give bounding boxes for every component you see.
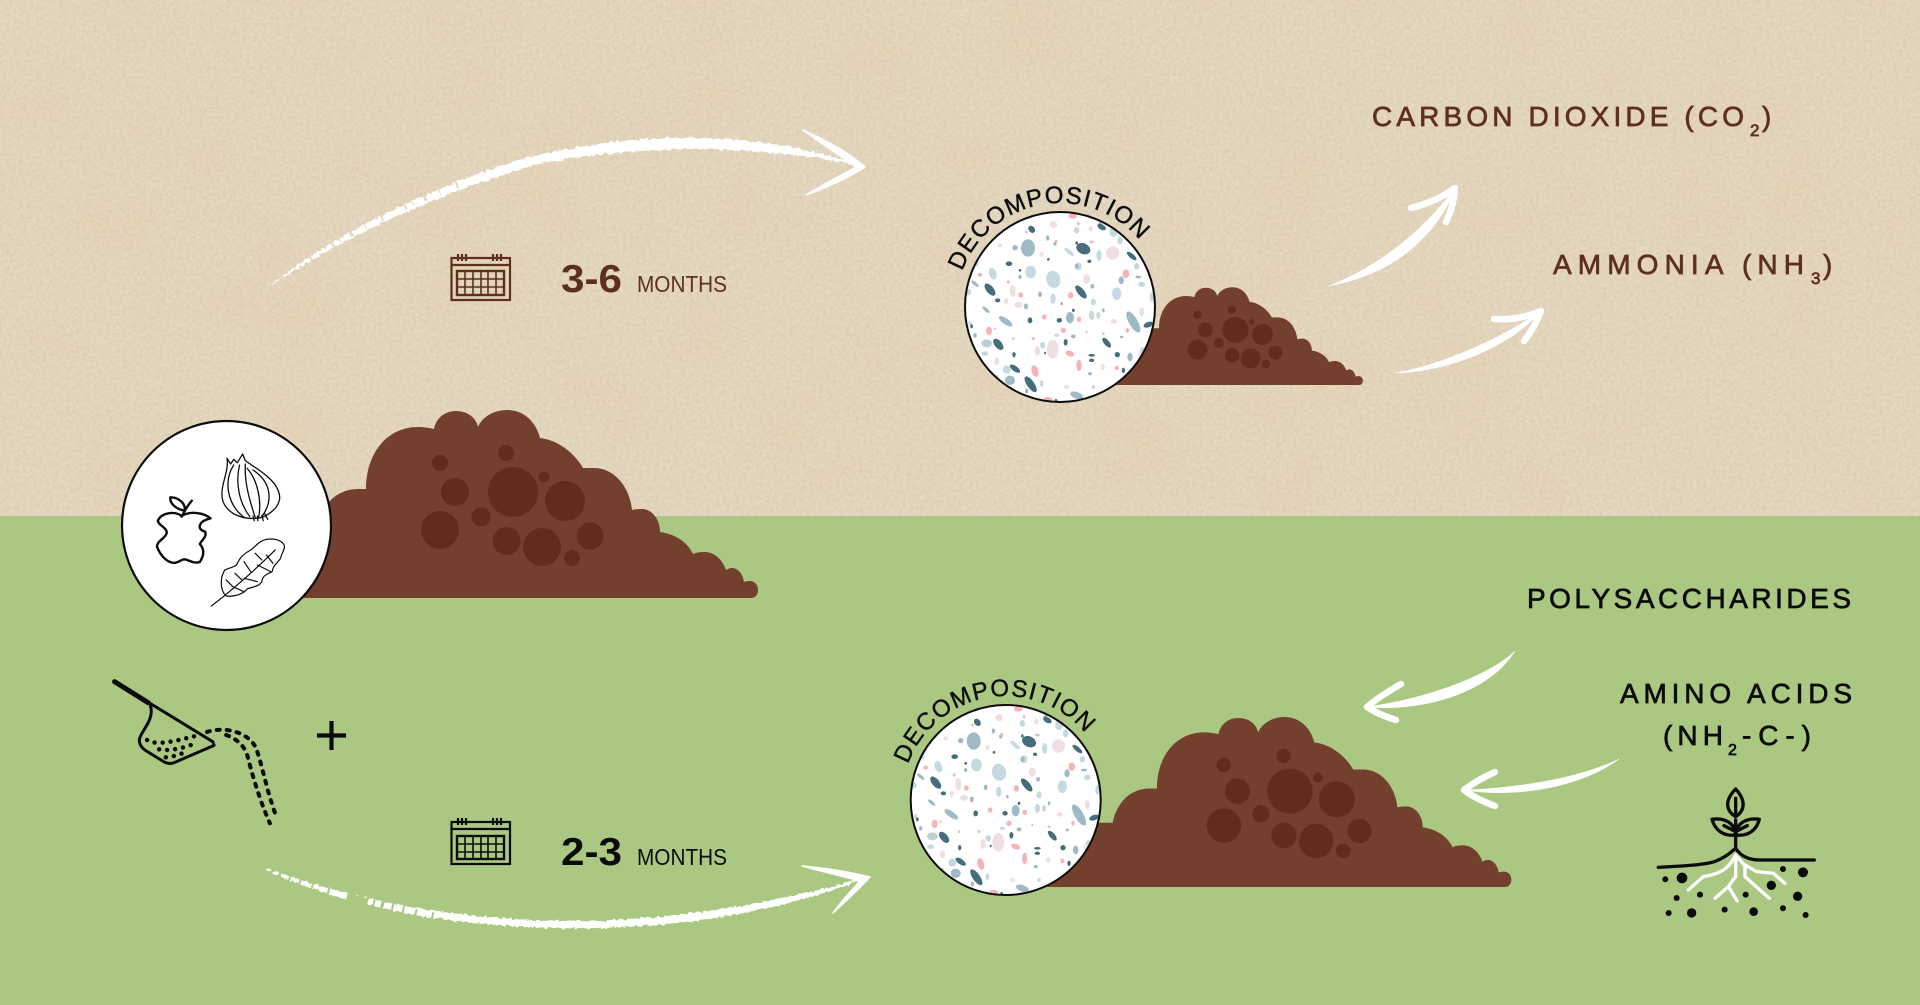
arrow: to ammonia [1396, 310, 1542, 373]
label: ammonia: 3 [1811, 269, 1820, 288]
duration label: 3-6 months: MONTHS [637, 271, 727, 297]
duration label: 3-6 months [561, 258, 727, 301]
plus sign [317, 721, 346, 750]
compost pile: large [240, 410, 758, 598]
icon: calendar brown [452, 254, 510, 300]
icon: apple core [157, 497, 211, 563]
label: carbon dioxide: 2 [1750, 121, 1759, 140]
label: amino acids: (NH [1663, 720, 1723, 751]
curved label: decomposition top: DECOMPOSITION [948, 186, 1150, 270]
compost pile: right bottom [1043, 717, 1511, 887]
curved label: decomposition bottom: DECOMPOSITION [893, 679, 1096, 763]
background: paper upper band [0, 0, 1920, 517]
arrow: from polysaccharides [1367, 651, 1515, 720]
label: polysaccharides: POLYSACCHARIDES [1527, 583, 1851, 614]
label: amino acids: 2 [1728, 742, 1737, 759]
icon: plant with roots [1658, 789, 1814, 918]
label: ammonia: ) [1823, 249, 1832, 280]
organic waste circle [122, 421, 331, 630]
duration label: 3-6 months: 3-6 [561, 258, 622, 301]
decomposition circle: top [965, 212, 1155, 402]
label: amino acids: AMINO ACIDS [1620, 678, 1852, 709]
arrow: long white top [264, 130, 865, 291]
duration label: 2-3 months: 2-3 [561, 831, 622, 874]
arrow: long white bottom [246, 860, 870, 928]
arrow: to carbon dioxide [1329, 187, 1456, 286]
label: amino acids: -C-) [1742, 720, 1811, 751]
icon: leaf [211, 539, 284, 606]
background: green lower band [0, 516, 1920, 1005]
label: ammonia: AMMONIA (NH [1553, 249, 1804, 280]
duration label: 2-3 months: MONTHS [637, 844, 727, 870]
icon: calendar black [452, 818, 510, 864]
compost pile: small top [1094, 287, 1363, 385]
label: carbon dioxide: CARBON DIOXIDE (CO [1372, 101, 1744, 132]
arrow: from amino acids [1464, 759, 1619, 806]
icon: onion [222, 454, 280, 521]
duration label: 2-3 months [561, 831, 727, 874]
decomposition circle: bottom [911, 705, 1101, 895]
label: carbon dioxide: ) [1762, 101, 1771, 132]
icon: soil scoop pouring [115, 682, 277, 823]
